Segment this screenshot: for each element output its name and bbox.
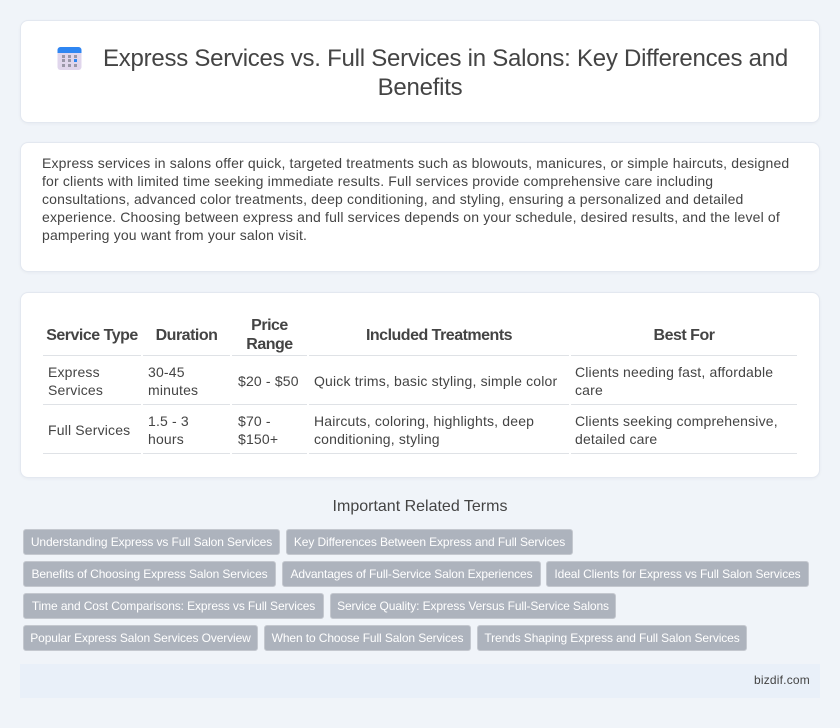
panel: intro text	[20, 142, 820, 272]
text: Trends Shaping Express and Full Salon Services	[484, 631, 740, 645]
panel: comparison table: Service Type	[46, 327, 138, 344]
related term tags	[23, 529, 809, 651]
text: Advantages of Full-Service Salon Experiences	[291, 567, 532, 581]
text: When to Choose Full Salon Services	[272, 631, 463, 645]
panel: comparison table: $70 -	[238, 413, 271, 429]
panel: comparison table: 1.5 - 3	[148, 413, 189, 429]
intro paragraph: pampering you want from your salon visit.	[42, 227, 307, 243]
table header	[46, 317, 715, 353]
panel: comparison table: Duration	[156, 327, 217, 344]
title: Express Services vs. Full Services in Salons: Key Differences and	[103, 45, 788, 72]
text: Popular Express Salon Services Overview	[30, 631, 251, 645]
panel: comparison table: Included Treatments	[366, 327, 512, 344]
icon: calendar	[58, 47, 82, 70]
panel: comparison table: Haircuts, coloring, highlights, deep	[314, 413, 534, 429]
footer source: bizdif.com	[754, 673, 810, 687]
panel: comparison table: detailed care	[575, 431, 657, 447]
panel: comparison table: Express	[48, 364, 100, 380]
row: express services	[48, 364, 773, 398]
panel: comparison table: hours	[148, 431, 184, 447]
text: Benefits of Choosing Express Salon Services	[31, 567, 268, 581]
intro paragraph	[42, 155, 789, 243]
panel: comparison table: Full Services	[48, 422, 130, 438]
title	[103, 45, 788, 101]
panel: comparison table: Clients seeking comprehensive,	[575, 413, 778, 429]
text: Understanding Express vs Full Salon Services	[31, 535, 272, 549]
panel: comparison table: 30-45	[148, 364, 185, 380]
heading: important related terms: Important Related Terms	[333, 498, 507, 515]
panel: comparison table: Range	[246, 336, 293, 353]
panel: comparison table	[20, 292, 820, 478]
panel: comparison table: conditioning, styling	[314, 431, 440, 447]
row: full services	[48, 413, 778, 447]
panel: comparison table: minutes	[148, 382, 198, 398]
intro paragraph: Express services in salons offer quick, targeted treatments such as blowouts, manicures, or simple haircuts, designed	[42, 155, 789, 171]
text: Time and Cost Comparisons: Express vs Full Services	[32, 599, 315, 613]
panel: comparison table: $150+	[238, 431, 278, 447]
intro paragraph: experience. Choosing between express and full services depends on your schedule, desired results, and the level of	[42, 209, 780, 225]
panel: comparison table: Clients needing fast, affordable	[575, 364, 773, 380]
panel: comparison table: Best For	[654, 327, 714, 344]
text: Service Quality: Express Versus Full-Service Salons	[337, 599, 609, 613]
title: Benefits	[378, 74, 462, 101]
panel: comparison table: $20 - $50	[238, 373, 299, 389]
panel: comparison table: care	[575, 382, 603, 398]
text: Ideal Clients for Express vs Full Salon Services	[554, 567, 801, 581]
panel: comparison table: Quick trims, basic styling, simple color	[314, 373, 557, 389]
panel: comparison table: Services	[48, 382, 103, 398]
intro paragraph: consultations, advanced color treatments, deep conditioning, and styling, ensuring a personalized and detailed	[42, 191, 743, 207]
panel: comparison table: Price	[251, 317, 288, 334]
text: Key Differences Between Express and Full Services	[294, 535, 565, 549]
title panel	[20, 20, 820, 123]
intro paragraph: for clients with limited time seeking immediate results. Full services provide comprehensive care including	[42, 173, 713, 189]
footer bar	[20, 664, 820, 698]
